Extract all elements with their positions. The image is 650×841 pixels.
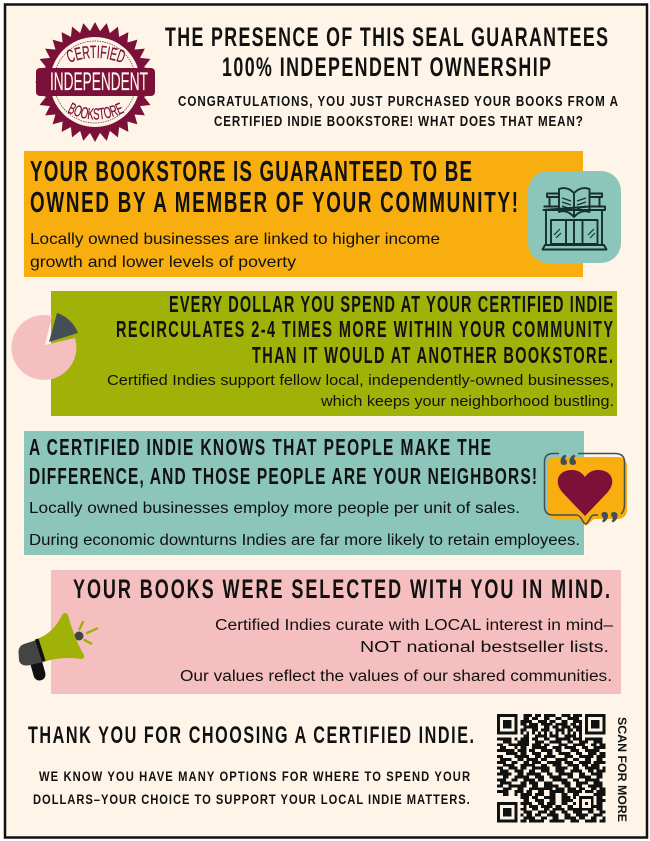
panel: people make the difference [24,431,584,555]
subtitle: CONGRATULATIONS, YOU JUST PURCHASED YOUR BOOKS FROM A [178,93,618,109]
icon: speech bubble with heart [544,454,627,526]
icon: certified independent bookstore seal: INDEPENDENT [50,68,148,96]
text: employment: Locally owned businesses employ more people per unit of sales. [29,500,520,517]
text: income growth: growth and lower levels of poverty [30,254,296,271]
closing text: WE KNOW YOU HAVE MANY OPTIONS FOR WHERE TO SPEND YOUR [39,769,470,784]
title: THE PRESENCE OF THIS SEAL GUARANTEES [165,21,608,52]
heading: every dollar recirculates: EVERY DOLLAR YOU SPEND AT YOUR CERTIFIED INDIE [169,293,613,318]
closing text [33,769,470,807]
heading: guaranteed owned by community member [30,156,518,219]
heading: neighbors [29,435,537,490]
heading: neighbors: DIFFERENCE, AND THOSE PEOPLE ARE YOUR NEIGHBORS! [29,464,537,490]
icon: certified independent bookstore seal [35,22,155,142]
scan for more label: SCAN FOR MORE [615,717,629,822]
text: employment: During economic downturns Indies are far more likely to retain employees. [29,532,580,549]
panel: dollars recirculate [51,291,617,416]
heading: every dollar recirculates [116,293,613,369]
pie chart icon [11,313,78,380]
heading: neighbors: A CERTIFIED INDIE KNOWS THAT PEOPLE MAKE THE [29,435,491,461]
QR code [497,715,605,821]
panel: books selected with you in mind [51,570,621,694]
heading: guaranteed owned by community member: OWNED BY A MEMBER OF YOUR COMMUNITY! [30,187,518,219]
closing text: DOLLARS–YOUR CHOICE TO SUPPORT YOUR LOCAL INDIE MATTERS. [33,792,470,807]
text: local interest and values [180,617,613,685]
heading: every dollar recirculates: RECIRCULATES 2-4 TIMES MORE WITHIN YOUR COMMUNITY [116,318,613,343]
heading: every dollar recirculates: THAN IT WOULD AT ANOTHER BOOKSTORE. [252,344,613,369]
subtitle [178,93,618,129]
text: support local businesses [107,372,614,410]
closing heading: THANK YOU FOR CHOOSING A CERTIFIED INDIE. [28,722,474,749]
icon: certified independent bookstore seal: CERTIFIED [66,46,125,62]
text: local interest and values: Our values reflect the values of our shared communities. [180,668,612,685]
heading: guaranteed owned by community member: YOUR BOOKSTORE IS GUARANTEED TO BE [30,156,472,188]
icon: bookstore building with open book [528,171,621,263]
subtitle: CERTIFIED INDIE BOOKSTORE! WHAT DOES THAT MEAN? [214,113,583,129]
text: employment [29,500,580,549]
icon: megaphone [18,613,97,674]
text: local interest and values: NOT national bestseller lists. [360,639,609,656]
panel: community ownership [24,151,583,277]
text: support local businesses: which keeps your neighborhood bustling. [320,393,614,410]
text: local interest and values: Certified Indies curate with LOCAL interest in mind– [215,617,613,634]
title: 100% INDEPENDENT OWNERSHIP [222,51,551,82]
text: support local businesses: Certified Indies support fellow local, independently-owned businesses, [107,372,614,389]
text: income growth [30,231,440,271]
title [165,21,608,82]
text: income growth: Locally owned businesses are linked to higher income [30,231,440,248]
icon: certified independent bookstore seal: BOOKSTORE [68,102,124,120]
heading: selected with you in mind: YOUR BOOKS WERE SELECTED WITH YOU IN MIND. [73,573,610,604]
